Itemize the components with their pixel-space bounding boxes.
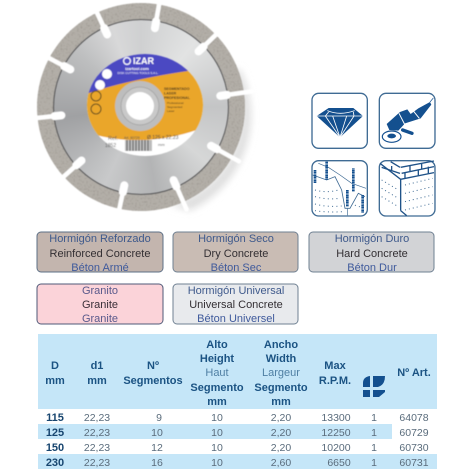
table header: Nº Art. [397,367,431,379]
material box: granite: Granito [82,285,118,297]
material box: dry concrete: Béton Sec [211,262,262,274]
table row 230: 6650 [327,457,351,469]
diamond cutting disc [30,0,252,217]
disc brushed steel body [51,17,231,197]
table row 125: 10 [151,427,163,439]
label text [91,56,191,151]
table row 115: 64078 [399,412,429,424]
table row 150: 12 [151,442,163,454]
icon: reinforced concrete [312,161,367,216]
disc label [86,53,204,156]
expansion slots [30,0,252,217]
hub ring [115,81,165,131]
material box: universal concrete: Béton Universel [197,313,275,325]
label text: PROFESIONAL [164,96,191,100]
table header: d1 [91,360,103,372]
table row 125: 1 [371,427,377,439]
table header: mm [271,396,291,408]
material box: reinforced concrete: Béton Armé [71,262,129,274]
table row 150: 1 [371,442,377,454]
label text: 1852 [105,143,116,149]
table row 125: 125 [46,427,64,439]
icon: diamond [312,93,367,148]
table row 150: 150 [46,442,64,454]
arbor hole [126,92,154,120]
table row 125: 10 [211,427,223,439]
table header: D [51,360,59,372]
label text: Professional [167,101,184,105]
table header: Ancho [264,339,298,351]
table header: Height [200,353,234,365]
table header: Largeur [262,367,300,379]
icon: packaging units [363,376,385,397]
label text: mm [158,142,165,147]
material box: dry concrete: Dry Concrete [204,248,268,260]
material box: granite: Granite [82,313,118,325]
table row 150: 60730 [399,442,429,454]
material box: universal concrete: Hormigón Universal [188,285,284,297]
table row 230: 1 [371,457,377,469]
material box: reinforced concrete: Hormigón Reforzado [49,233,151,245]
table row 115 [46,412,429,424]
table row 115: 22,23 [84,412,110,424]
label text: Laser [167,109,175,113]
table row 115: 9 [156,412,162,424]
table header: Nº [147,360,159,372]
table row 230: 22,23 [84,457,110,469]
table row 150 [46,442,429,454]
disc drop shadow [170,70,250,210]
label text: Art. 60729 [124,136,140,140]
table row 150: 10200 [321,442,351,454]
table row 150: 2,20 [271,442,291,454]
label text: izartool.com [125,66,149,71]
material box: dry concrete [173,232,298,274]
table row 150: 10 [211,442,223,454]
table row 115: 10 [211,412,223,424]
table header: Alto [206,339,228,351]
diamond segment ring [30,0,252,217]
table row 150: 22,23 [84,442,110,454]
material box: reinforced concrete [37,232,163,274]
material box: hard concrete: Hard Concrete [336,248,408,260]
material box: hard concrete [309,232,434,274]
table header: mm [45,375,65,387]
material box: dry concrete: Hormigón Seco [198,233,274,245]
table header: R.P.M. [319,375,351,387]
icon: angle grinder [379,93,435,148]
table header: Segmentos [123,375,183,387]
label text: Ø 125 x 22.23 [147,135,179,141]
table row 115: 13300 [321,412,351,424]
material box: granite [37,284,163,325]
table row 230: 230 [46,457,64,469]
label text: IZAR [133,56,154,66]
table row 115: 2,20 [271,412,291,424]
table header: Haut [205,367,229,379]
table row 125: 12250 [321,427,351,439]
table row 125: 22,23 [84,427,110,439]
table row 115: 115 [46,412,64,424]
table header [38,334,437,409]
label text: Ref. [108,136,119,142]
table row 125 [46,427,429,439]
table row 230: 60731 [399,457,429,469]
table row 230: 16 [151,457,163,469]
table header: Width [266,353,296,365]
table header: Segmento [190,382,244,394]
table row 125: 60729 [399,427,429,439]
icon: brick and concrete block [379,161,435,216]
table header: mm [87,375,107,387]
table row stripes [38,424,437,469]
table row 125: 2,20 [271,427,291,439]
label text: DISK CUTTING TOOLS S.A.L. [117,71,159,75]
material box: hard concrete: Béton Dur [347,262,397,274]
material box: universal concrete: Universal Concrete [189,299,283,311]
label text: Segmented [167,105,183,109]
material box: reinforced concrete: Reinforced Concrete [50,248,150,260]
label text: SEGMENTADO [164,87,190,91]
table row 230: 2,60 [271,457,291,469]
specifications table [38,334,437,469]
table row 230 [46,457,429,469]
material box: hard concrete: Hormigón Duro [335,233,409,245]
label text: LASER [164,92,177,96]
table header: Max [324,360,347,372]
table row 115: 1 [371,412,377,424]
table row 230: 10 [211,457,223,469]
table header: mm [207,396,227,408]
table header: Segmento [254,382,308,394]
material box: universal concrete [173,284,298,325]
material box: granite: Granite [82,299,118,311]
